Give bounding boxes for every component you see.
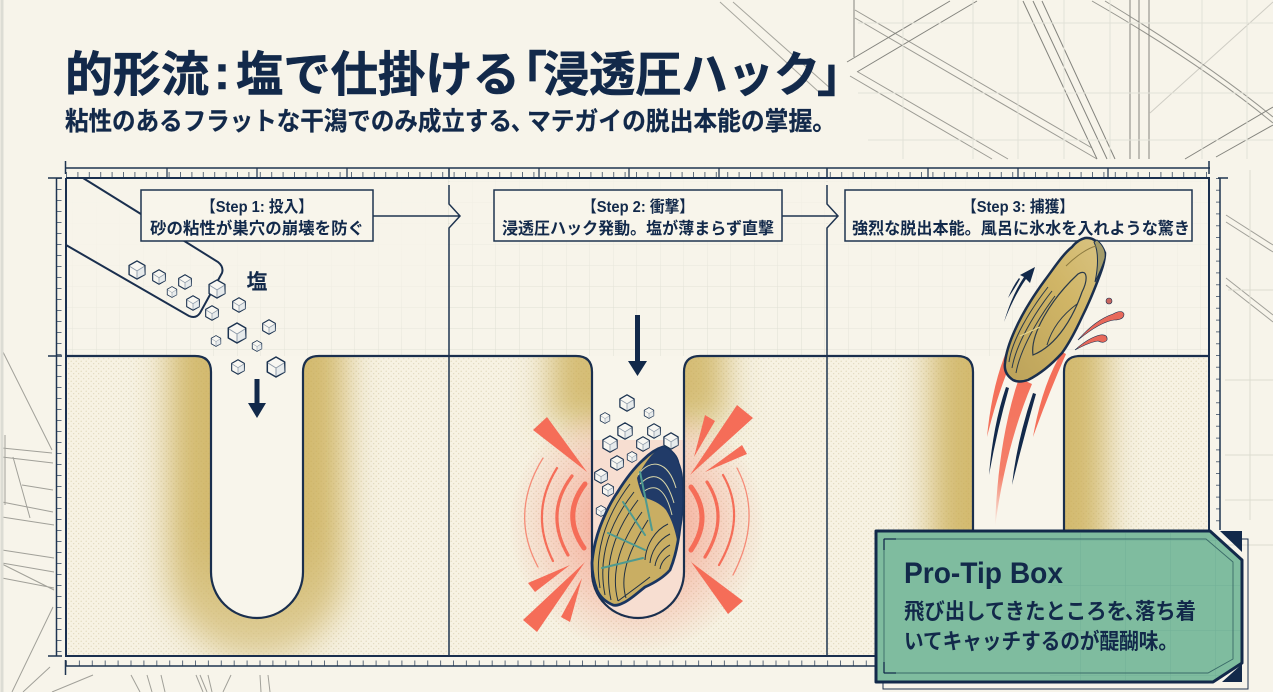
pro-tip body: 飛び出してきたところを — [904, 599, 1127, 624]
subtitle — [65, 108, 836, 136]
panel 1: salt chute and crystals — [66, 178, 285, 418]
blueprint ruler frame — [48, 161, 1228, 675]
title: 塩で仕掛ける — [236, 49, 520, 102]
title: 」 — [817, 49, 865, 102]
title: 的形流 — [65, 49, 209, 102]
arrow: upward motion — [1004, 267, 1035, 322]
pro-tip heading: Pro-Tip Box — [904, 557, 1063, 590]
step 1 label: 【Step 1: 投入】 — [201, 197, 313, 216]
arrow: salt pressing down — [628, 315, 647, 376]
razor clam jumping — [1005, 238, 1105, 382]
salt crystals — [129, 261, 285, 377]
step 3 label: 強烈な脱出本能。風呂に氷水を入れような驚き — [852, 218, 1190, 238]
panel 3: escape illustration — [987, 238, 1124, 527]
salt crystals in burrow — [595, 395, 678, 516]
pro-tip box — [876, 531, 1248, 689]
back outline and corner accents — [883, 539, 1248, 689]
title: 浸透圧ハック — [543, 49, 820, 102]
step 1 label — [141, 190, 373, 241]
subtitle: マテガイの脱出本能の掌握。 — [527, 108, 836, 136]
shock arcs — [525, 458, 749, 575]
title: : — [214, 47, 230, 100]
step 3 label — [845, 190, 1192, 241]
salt label: 塩 — [246, 271, 268, 294]
sky grid — [66, 178, 1209, 356]
sand cross-section — [68, 357, 1207, 655]
red impact wedges — [523, 405, 753, 632]
subtitle: 粘性のあるフラットな干潟でのみ成立する — [65, 108, 512, 136]
step 2 label: 【Step 2: 衝撃】 — [582, 198, 694, 216]
main frame — [66, 178, 1209, 656]
panel dividers with step chevrons — [373, 185, 838, 656]
pro-tip body: 落ち着 — [1135, 599, 1196, 624]
step 1 label: 砂の粘性が巣穴の崩壊を防ぐ — [150, 218, 364, 238]
razor clam under attack — [592, 447, 682, 605]
navy speed lines — [989, 387, 1036, 485]
title: 「 — [499, 49, 547, 102]
red impact glow — [518, 422, 756, 644]
burrow slots — [195, 356, 1080, 660]
subtitle: 、 — [511, 108, 533, 136]
pro-tip body: 、 — [1125, 599, 1145, 624]
red water splash — [1075, 298, 1124, 350]
pro-tip body — [904, 599, 1196, 654]
step 3 label: 【Step 3: 捕獲】 — [962, 197, 1074, 216]
step 2 label — [494, 190, 782, 241]
red motion streaks — [987, 350, 1066, 527]
pro-tip body: いてキャッチするのが醍醐味。 — [904, 629, 1178, 654]
title — [65, 47, 865, 102]
salt chute — [66, 178, 222, 317]
step 2 label: 浸透圧ハック発動。塩が薄まらず直撃 — [502, 218, 774, 238]
panel 2: impact illustration — [523, 315, 753, 632]
arrow: salt falling — [248, 379, 266, 418]
